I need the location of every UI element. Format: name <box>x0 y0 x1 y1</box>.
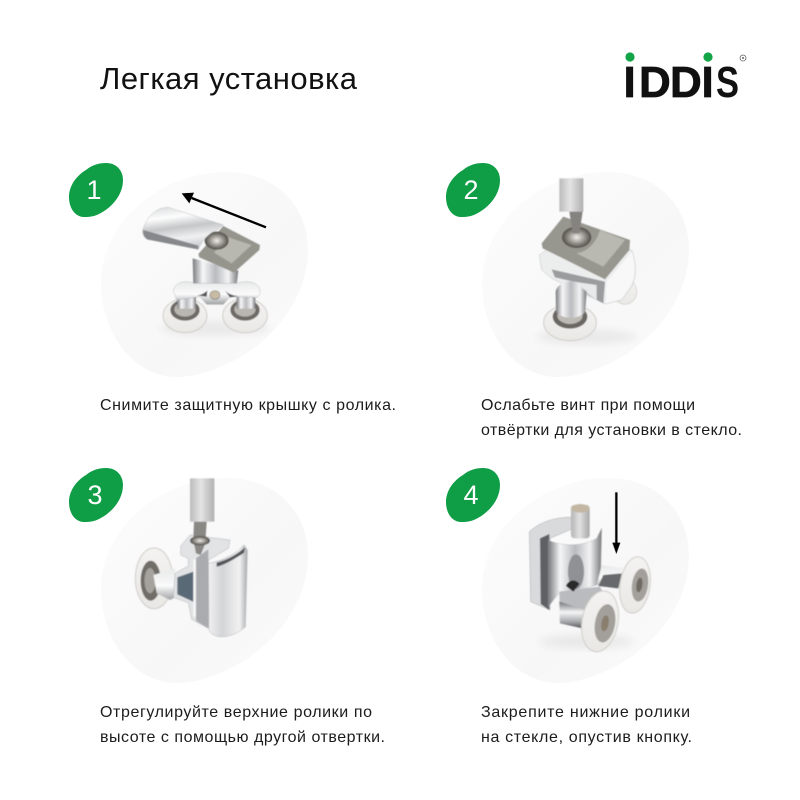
panel: step 1 <box>69 163 308 377</box>
number badge 3: 3 <box>87 480 103 510</box>
background blob 3 <box>101 478 308 683</box>
number badge 2: 2 <box>463 175 479 205</box>
photo: roller with cover <box>143 193 270 336</box>
number badge 1: 1 <box>86 175 102 205</box>
arrow: cover slides left <box>182 193 266 227</box>
background blob 2 <box>482 172 689 377</box>
logo: IDDIS: IDDI <box>624 58 714 107</box>
title: Легкая установка <box>100 61 358 96</box>
text: отвёртки для установки в стекло. <box>481 422 742 439</box>
background blob 1 <box>101 172 308 377</box>
panel: step 4 <box>446 468 689 683</box>
number badge 4: 4 <box>463 480 479 510</box>
text: высоте с помощью другой отвертки. <box>100 729 385 746</box>
arrow: press down <box>612 492 620 554</box>
number badge 4 <box>446 468 500 522</box>
caption 3: Отрегулируйте верхние ролики по <box>100 704 372 721</box>
background blob 4 <box>482 478 689 683</box>
caption 1: Снимите защитную крышку с ролика. <box>100 397 396 414</box>
photo: adjusting upper rollers <box>135 478 247 637</box>
caption 2: Ослабьте винт при помощи <box>481 397 695 414</box>
number badge 1 <box>69 163 123 217</box>
logo: IDDIS <box>624 52 746 107</box>
text: на стекле, опустив кнопку. <box>481 729 692 746</box>
photo: lower rollers on glass <box>529 492 654 655</box>
photo: screwdriver loosening screw <box>537 178 637 344</box>
number badge 2 <box>446 163 500 217</box>
number badge 3 <box>69 468 123 522</box>
caption 4: Закрепите нижние ролики <box>481 704 690 721</box>
logo: IDDIS: S <box>716 58 739 107</box>
panel: step 3 <box>69 468 308 683</box>
panel: step 2 <box>446 163 689 377</box>
